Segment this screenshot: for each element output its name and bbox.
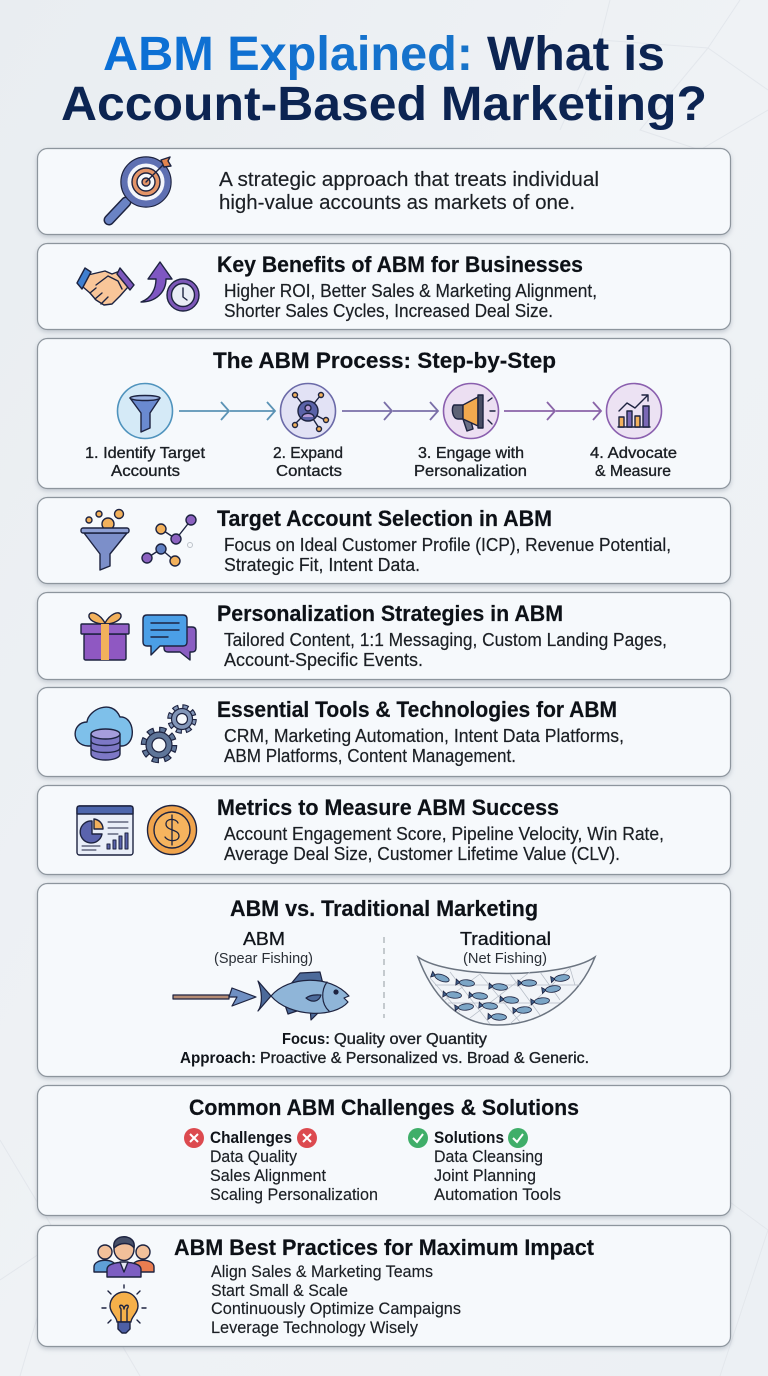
tools text: CRM, Marketing Automation, Intent Data Platforms, xyxy=(224,726,624,746)
icon: dollar coin xyxy=(148,806,196,854)
step 1: identify: 1. Identify Target xyxy=(85,445,206,462)
personalization text xyxy=(224,630,667,670)
step 4: advocate: 4. Advocate xyxy=(590,445,677,462)
definition text: high-value accounts as markets of one. xyxy=(219,192,575,214)
solutions column xyxy=(408,1128,561,1204)
metrics text: Average Deal Size, Customer Lifetime Value (CLV). xyxy=(224,844,620,864)
Traditional label xyxy=(460,928,551,967)
best practices list: Align Sales & Marketing Teams xyxy=(211,1262,433,1281)
arrow: step 2 to 3 xyxy=(342,402,438,420)
comparison summary text: Quality over Quantity xyxy=(334,1031,487,1048)
selection text xyxy=(224,535,671,575)
solutions column: Joint Planning xyxy=(434,1166,536,1185)
ABM label: ABM xyxy=(243,928,285,949)
panel: target account selection xyxy=(38,498,730,584)
metrics text xyxy=(224,824,664,864)
heading: Metrics to Measure ABM Success xyxy=(217,795,559,820)
panel: personalization xyxy=(38,592,730,680)
heading: The ABM Process: Step-by-Step xyxy=(213,348,556,373)
comparison summary text: Proactive & Personalized vs. Broad & Generic. xyxy=(260,1050,589,1067)
best practices list: Continuously Optimize Campaigns xyxy=(211,1299,461,1318)
challenges column: Sales Alignment xyxy=(210,1166,326,1185)
heading: Target Account Selection in ABM xyxy=(217,506,552,531)
best practices list xyxy=(211,1262,461,1337)
icon: network nodes xyxy=(142,515,196,566)
comparison summary text xyxy=(180,1031,589,1067)
panel: definition xyxy=(38,148,730,234)
icon: dashboard xyxy=(77,806,133,855)
challenges column: Data Quality xyxy=(210,1147,297,1166)
challenges column xyxy=(184,1128,378,1204)
panel: process xyxy=(38,338,730,488)
icon: gift xyxy=(81,613,129,660)
step 1: identify xyxy=(85,384,206,480)
panel: key benefits xyxy=(38,244,730,330)
panel: challenges and solutions xyxy=(38,1086,730,1216)
heading: Common ABM Challenges & Solutions xyxy=(189,1095,579,1120)
heading: Personalization Strategies in ABM xyxy=(217,601,563,626)
best practices list: Leverage Technology Wisely xyxy=(211,1318,418,1337)
tools text: ABM Platforms, Content Management. xyxy=(224,746,516,766)
panel: ABM vs traditional xyxy=(38,884,730,1076)
ABM label xyxy=(214,928,313,967)
step 2: expand xyxy=(273,384,343,480)
challenges column: Scaling Personalization xyxy=(210,1185,378,1204)
step 1: identify: Accounts xyxy=(111,463,180,480)
icon: funnel with balls xyxy=(81,510,129,570)
benefits text xyxy=(224,281,597,321)
personalization text: Account-Specific Events. xyxy=(224,650,423,670)
personalization text: Tailored Content, 1:1 Messaging, Custom Landing Pages, xyxy=(224,630,667,650)
title: ABM Explained: xyxy=(103,28,473,81)
Traditional label: Traditional xyxy=(460,928,551,949)
heading: ABM Best Practices for Maximum Impact xyxy=(174,1235,594,1260)
ABM label: (Spear Fishing) xyxy=(214,951,313,967)
panel: metrics xyxy=(38,786,730,874)
solutions column: Solutions xyxy=(434,1129,504,1147)
heading: Essential Tools & Technologies for ABM xyxy=(217,697,617,722)
comparison summary text: Focus: xyxy=(282,1031,330,1048)
title: What is xyxy=(487,28,665,81)
challenges column: Challenges xyxy=(210,1129,292,1147)
icon: growth arrow and clock xyxy=(141,262,199,311)
arrow: step 3 to 4 xyxy=(504,402,601,420)
panel: best practices xyxy=(38,1226,730,1346)
icon: target magnifier xyxy=(109,157,171,220)
Traditional label: (Net Fishing) xyxy=(463,951,547,967)
comparison summary text: Approach: xyxy=(180,1050,256,1067)
panel: tools xyxy=(38,688,730,776)
icon: fish xyxy=(258,972,349,1020)
best practices list: Start Small & Scale xyxy=(211,1281,348,1300)
step 4: advocate xyxy=(590,384,677,480)
icon: handshake xyxy=(77,268,134,305)
icon: team xyxy=(94,1237,154,1277)
icon: gears xyxy=(144,707,194,760)
definition text xyxy=(219,169,599,214)
icon: fishing net with fish xyxy=(418,957,595,1025)
arrow: step 1 to 2 xyxy=(179,402,275,420)
step 3: engage: Personalization xyxy=(414,463,527,480)
step 3: engage: 3. Engage with xyxy=(418,445,524,462)
definition text: A strategic approach that treats individual xyxy=(219,169,599,191)
title: Account-Based Marketing? xyxy=(61,78,707,131)
icon: light bulb xyxy=(102,1285,146,1333)
icon: spear xyxy=(173,988,256,1006)
solutions column: Data Cleansing xyxy=(434,1147,543,1166)
selection text: Strategic Fit, Intent Data. xyxy=(224,555,420,575)
benefits text: Shorter Sales Cycles, Increased Deal Size. xyxy=(224,301,553,321)
icon: cloud database xyxy=(75,707,132,760)
metrics text: Account Engagement Score, Pipeline Velocity, Win Rate, xyxy=(224,824,664,844)
heading: Key Benefits of ABM for Businesses xyxy=(217,252,583,277)
icon: chat bubbles xyxy=(143,615,196,660)
step 2: expand: 2. Expand xyxy=(273,445,343,462)
heading: ABM vs. Traditional Marketing xyxy=(230,896,538,921)
benefits text: Higher ROI, Better Sales & Marketing Alignment, xyxy=(224,281,597,301)
title xyxy=(61,28,707,131)
step 2: expand: Contacts xyxy=(276,463,342,480)
selection text: Focus on Ideal Customer Profile (ICP), Revenue Potential, xyxy=(224,535,671,555)
tools text xyxy=(224,726,624,766)
step 3: engage xyxy=(414,384,527,480)
solutions column: Automation Tools xyxy=(434,1185,561,1204)
step 4: advocate: & Measure xyxy=(595,463,671,480)
